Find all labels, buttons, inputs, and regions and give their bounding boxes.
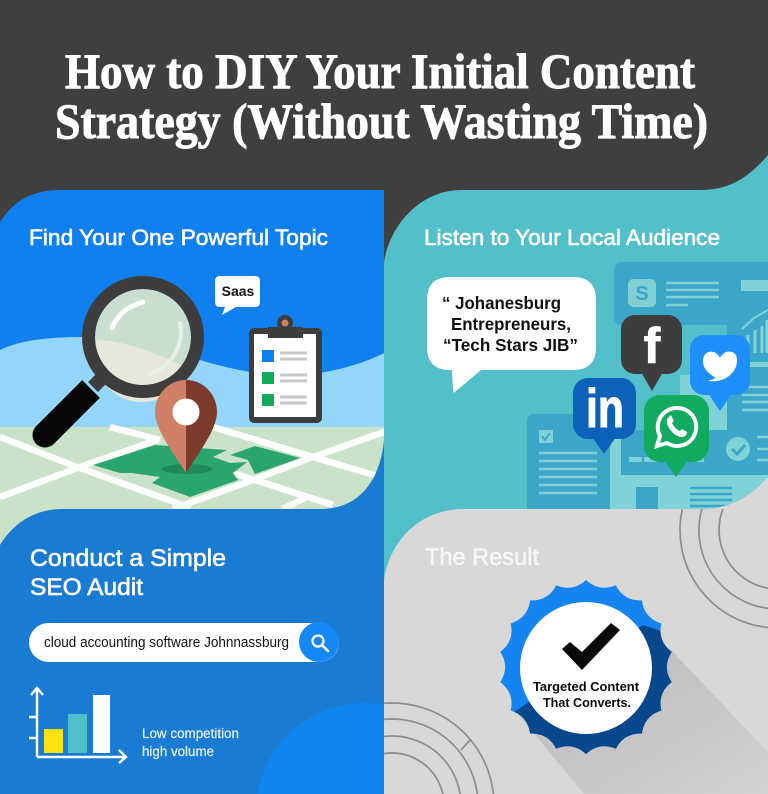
map scene [0,337,384,509]
badge: That Converts. [543,695,631,710]
magnifying glass [32,282,198,448]
icon: heart [690,335,750,411]
icon: facebook [621,315,682,391]
title [55,43,708,149]
chart caption: Low competition [142,726,239,741]
chart caption: high volume [142,744,214,759]
badge [500,580,672,754]
corner of teal panel [384,509,462,580]
clipboard [249,315,322,423]
bar chart [29,688,126,763]
heading: find topic: Find Your One Powerful Topic [29,225,328,250]
speech bubble: local quote: Entrepreneurs, [451,314,571,334]
panel: the result [384,477,768,794]
chart caption [142,726,239,759]
decorative arcs [384,509,768,794]
badge: Targeted Content [533,679,640,694]
search bar [29,622,339,662]
heading: listen: Listen to Your Local Audience [424,225,720,250]
long shadow [517,650,768,794]
panel: find your one powerful topic [0,190,384,545]
heading: SEO audit [30,545,226,601]
title: How to DIY Your Initial Content [65,43,695,99]
icon: whatsapp [644,395,709,477]
heading: the result: The Result [425,544,539,571]
icon: facebook: f [644,318,661,374]
speech bubble: Saas [215,276,260,315]
speech bubble: local quote [427,277,596,393]
panel: conduct a simple SEO audit [0,440,384,794]
panel: listen to your local audience [384,155,768,580]
map corner [0,509,60,545]
background dashboards [527,262,768,509]
heading: SEO audit: SEO Audit [30,574,143,601]
background dashboards: S [635,283,649,305]
location pin [155,380,217,474]
icon: linkedin [573,377,636,454]
search bar: cloud accounting software Johnnassburg [44,635,289,651]
speech bubble: Saas: Saas [222,283,255,299]
heading: SEO audit: Conduct a Simple [30,545,226,572]
icon: linkedin: in [586,377,624,439]
title: Strategy (Without Wasting Time) [55,93,708,149]
speech bubble: local quote: “ Johanesburg [442,293,561,313]
speech bubble: local quote: “Tech Stars JIB” [443,335,578,355]
